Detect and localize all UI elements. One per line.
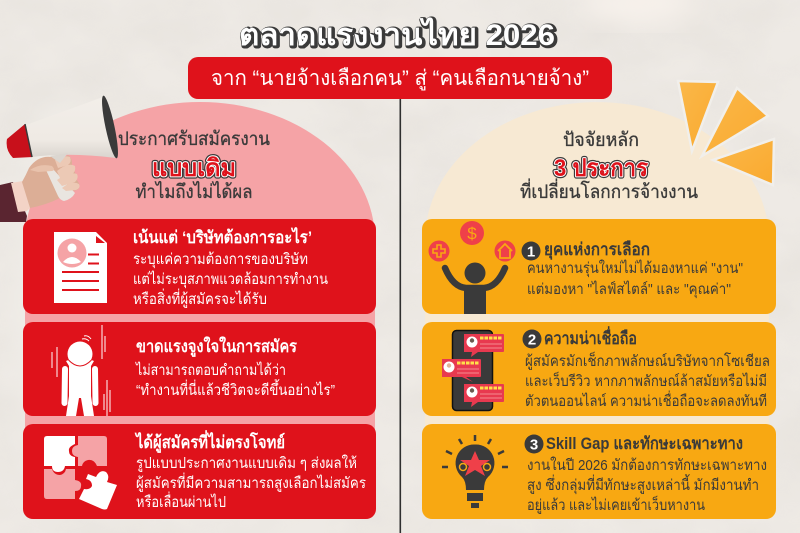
card: credibility: ความน่าเชื่อถือ: [544, 326, 637, 348]
right heading: [520, 130, 698, 203]
badge: number 2: [522, 330, 542, 348]
left heading: ประกาศรับสมัครงาน: [118, 129, 270, 150]
card: company focus: เน้นแต่ ‘บริษัทต้องการอะไร’: [133, 227, 312, 247]
title: ตลาดแรงงานไทย 2026: [240, 18, 556, 53]
badge: number 3: 3: [530, 436, 538, 454]
left heading: แบบเดิม: [152, 155, 236, 182]
right heading: 3 ประการ: [554, 155, 648, 182]
icon: puzzle pieces: [44, 436, 117, 510]
left heading: [118, 129, 270, 203]
badge: number 2: 2: [528, 332, 536, 348]
card: era of choice: คนหางานรุ่นใหม่ไม่ได้มองหาแค่ "งาน": [527, 259, 743, 278]
center divider: [400, 99, 401, 533]
panel: three key factors: [422, 81, 776, 519]
card: skill gap: งานในปี 2026 มักต้องการทักษะเฉพาะทาง: [527, 456, 767, 474]
card: lack of motivation: ขาดแรงจูงใจในการสมัคร: [136, 336, 298, 358]
icon: megaphone with hand: [0, 95, 121, 222]
card: era of choice: แต่มองหา "ไลฟ์สไตล์" และ "คุณค่า": [527, 280, 731, 299]
card: skill gap: [422, 424, 776, 519]
left heading: ทำไมถึงไม่ได้ผล: [136, 181, 252, 203]
right arch background: [425, 102, 769, 505]
badge: number 3: [524, 434, 544, 454]
title: ตลาดแรงงานไทย 2026: [239, 17, 555, 52]
right heading: ที่เปลี่ยนโลกการจ้างงาน: [520, 178, 698, 203]
card: company focus: [23, 219, 376, 314]
card: credibility: [422, 322, 776, 416]
card: mismatched applicants: หรือเลื่อนผ่านไป: [136, 491, 226, 511]
panel: traditional job posting: [23, 102, 376, 519]
card: skill gap: อยู่แล้ว และไม่เคยเข้าเว็บหางาน: [527, 495, 705, 514]
subtitle banner: [188, 57, 612, 99]
card: credibility: ผู้สมัครมักเช็กภาพลักษณ์บริษัทจากโซเชียล: [525, 351, 770, 370]
card: credibility: ตัวตนออนไลน์ ความน่าเชื่อถือจะลดลงทันที: [525, 390, 767, 410]
card: credibility: และเว็บรีวิว หากภาพลักษณ์ล้าสมัยหรือไม่มี: [525, 371, 767, 390]
left arch background: [25, 102, 375, 505]
card: skill gap: สูง ซึ่งกลุ่มที่มีทักษะสูงเหล่านี้ มักมีงานทำ: [527, 474, 759, 495]
badge: number 1: [522, 242, 540, 260]
left heading: แบบเดิม: [152, 155, 236, 182]
icon: light bulb with star: [442, 435, 508, 508]
icon: phone with reviews: [442, 330, 504, 410]
card: mismatched applicants: ผู้สมัครที่มีความสามารถสูงเลือกไม่สมัคร: [136, 472, 366, 492]
card: mismatched applicants: [23, 424, 376, 519]
icon: person with choices: $: [467, 224, 477, 243]
card: mismatched applicants: รูปแบบประกาศงานแบบเดิม ๆ ส่งผลให้: [136, 454, 357, 472]
card: lack of motivation: “ทำงานที่นี่แล้วชีวิตจะดีขึ้นอย่างไร”: [136, 379, 335, 399]
card: era of choice: ยุคแห่งการเลือก: [544, 239, 650, 260]
card: company focus: แต่ไม่ระบุสภาพแวดล้อมการทำงาน: [133, 270, 328, 289]
subtitle banner: จาก “นายจ้างเลือกคน” สู่ “คนเลือกนายจ้าง”: [211, 67, 589, 91]
icon: burst triangles: [678, 81, 774, 185]
icon: tired person: [52, 325, 110, 416]
icon: resume document: [54, 232, 107, 303]
card: mismatched applicants: ได้ผู้สมัครที่ไม่ตรงโจทย์: [134, 430, 285, 454]
card: lack of motivation: [23, 322, 376, 416]
card: company focus: ระบุแค่ความต้องการของบริษัท: [133, 251, 308, 269]
badge: number 1: 1: [527, 244, 535, 260]
icon: person with choices: [428, 221, 516, 314]
right heading: ปัจจัยหลัก: [563, 130, 639, 151]
card: company focus: หรือสิ่งที่ผู้สมัครจะได้รับ: [133, 288, 267, 308]
card: skill gap: Skill Gap และทักษะเฉพาะทาง: [546, 434, 743, 453]
card: era of choice: [422, 219, 776, 314]
card: lack of motivation: ไม่สามารถตอบคำถามได้ว่า: [135, 361, 286, 379]
right heading: 3 ประการ: [554, 155, 648, 182]
